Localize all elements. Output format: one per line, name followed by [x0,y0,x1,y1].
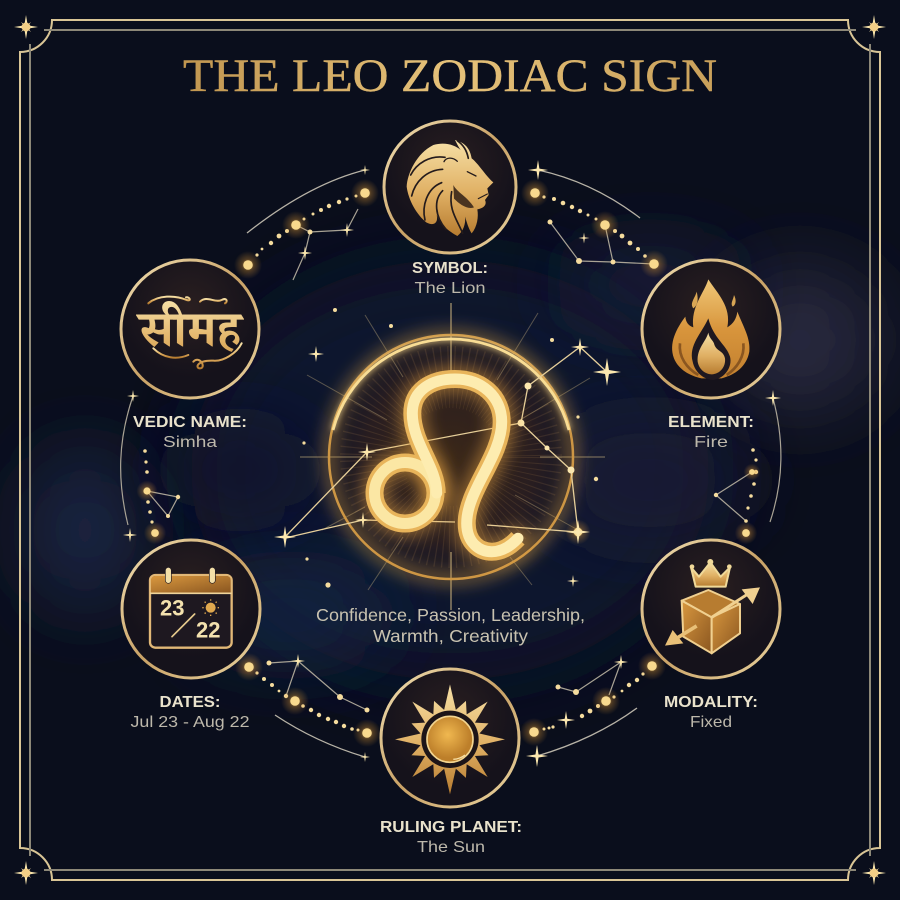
label: DATES: [160,694,220,711]
constellation arc: symbol to vedic name [234,165,379,280]
label [664,694,758,731]
traits caption: Confidence, Passion, Leadership, [316,605,585,625]
node: ruling planet [380,669,522,856]
label: Fixed [690,714,732,731]
label: ELEMENT: [668,414,754,431]
traits caption: Warmth, Creativity [373,626,528,646]
node: modality [642,540,780,731]
label: Fire [694,434,728,451]
icon: sun [395,684,505,794]
label: VEDIC NAME: [133,414,247,431]
label: MODALITY: [664,694,758,711]
node: symbol [384,121,516,297]
node: dates [122,540,260,731]
label [380,819,522,856]
icon: calendar: 22 [196,617,220,642]
label [133,414,247,451]
icon: calendar: 23 [160,596,184,621]
Leo glyph [374,379,518,552]
node: element [642,260,780,451]
icon: lion [407,140,493,236]
constellation arc: ruling planet to modality [520,652,666,767]
label: Simha [163,434,217,451]
node: vedic name [121,260,259,451]
label: RULING PLANET: [380,819,522,836]
label [412,260,488,297]
glowing ring [329,335,573,579]
central emblem [274,303,621,610]
constellation arc: dates to ruling planet [235,653,381,762]
label: The Lion [414,280,486,297]
central constellation [274,308,621,588]
constellation arc: symbol to element [521,160,668,278]
constellation arc: element to modality [714,390,781,544]
label: SYMBOL: [412,260,488,277]
icon: devanagari name: सीमह [136,300,244,378]
icon: calendar [150,567,232,648]
label: The Sun [417,839,485,856]
constellation arc: vedic name to dates [121,390,180,544]
label: Jul 23 - Aug 22 [130,714,250,731]
title: THE LEO ZODIAC SIGN [183,50,717,102]
icon: flame [672,279,749,380]
sunburst disc and rays [300,303,605,610]
icon: crown and cube [665,559,760,653]
label [130,694,250,731]
label [668,414,754,451]
traits caption [316,605,585,646]
